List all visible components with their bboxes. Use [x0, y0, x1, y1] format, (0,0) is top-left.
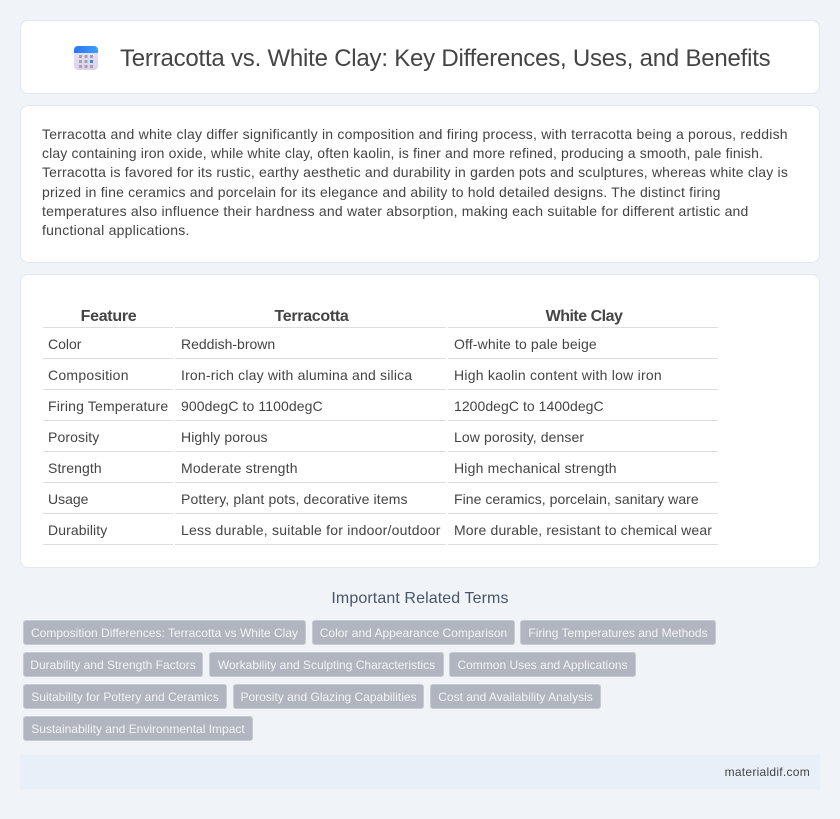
tag [209, 652, 444, 677]
description text [42, 126, 788, 238]
title: Terracotta vs. White Clay: Key Differences, Uses, and Benefits [120, 45, 770, 72]
header panel [20, 20, 820, 94]
tag: Suitability for Pottery and Ceramics [31, 690, 219, 704]
table header: Feature [81, 308, 136, 325]
tag [312, 620, 515, 645]
description text: Terracotta and white clay differ significantly in composition and firing process, with terracotta being a porous, reddish [42, 126, 788, 142]
tag [23, 652, 203, 677]
row: strength: Strength [48, 460, 102, 476]
row: porosity: Low porosity, denser [454, 429, 584, 445]
tag [23, 620, 306, 645]
table header: White Clay [546, 308, 622, 325]
tag: Color and Appearance Comparison [320, 626, 507, 640]
row: strength: High mechanical strength [454, 460, 617, 476]
table header [43, 308, 718, 328]
row: color [43, 336, 718, 359]
row: porosity: Porosity [48, 429, 99, 445]
panel: comparison table [20, 274, 820, 568]
row: durability: Less durable, suitable for indoor/outdoor [181, 522, 441, 538]
tag: Firing Temperatures and Methods [528, 626, 708, 640]
footer bar [20, 755, 820, 789]
tag [430, 684, 601, 709]
row: durability: More durable, resistant to chemical wear [454, 522, 712, 538]
row: color: Off-white to pale beige [454, 336, 597, 352]
tag group [23, 620, 716, 741]
footer source: materialdif.com [725, 765, 810, 779]
row: usage: Usage [48, 491, 88, 507]
row: usage [43, 491, 718, 514]
row: strength [43, 460, 718, 483]
table header: Terracotta [274, 308, 349, 325]
tag: Sustainability and Environmental Impact [31, 722, 245, 736]
tag: Common Uses and Applications [457, 658, 628, 672]
row: composition [43, 367, 718, 390]
row: durability [43, 522, 718, 545]
row: durability: Durability [48, 522, 107, 538]
row: firing temperature [43, 398, 718, 421]
tag: Porosity and Glazing Capabilities [240, 690, 417, 704]
heading: related terms: Important Related Terms [331, 590, 509, 607]
row: porosity: Highly porous [181, 429, 268, 445]
description text: temperatures also influence their hardness and water absorption, making each suitable for different artistic and [42, 203, 749, 219]
row: firing temperature: Firing Temperature [48, 398, 168, 414]
row: composition: High kaolin content with low iron [454, 367, 662, 383]
tag [233, 684, 424, 709]
row: firing temperature: 900degC to 1100degC [181, 398, 323, 414]
row: strength: Moderate strength [181, 460, 298, 476]
tag: Composition Differences: Terracotta vs White Clay [31, 626, 298, 640]
description text: clay containing iron oxide, while white clay, often kaolin, is finer and more refined, producing a smooth, pale finish. [42, 145, 763, 161]
row: color: Reddish-brown [181, 336, 275, 352]
row: porosity [43, 429, 718, 452]
description text: functional applications. [42, 222, 190, 238]
tag [520, 620, 716, 645]
icon: calendar [74, 46, 98, 70]
row: firing temperature: 1200degC to 1400degC [454, 398, 604, 414]
row: composition: Composition [48, 367, 129, 383]
table [43, 308, 718, 545]
row: usage: Pottery, plant pots, decorative items [181, 491, 408, 507]
tag: Cost and Availability Analysis [438, 690, 593, 704]
row: usage: Fine ceramics, porcelain, sanitary ware [454, 491, 699, 507]
panel: description [20, 105, 820, 263]
row: color: Color [48, 336, 81, 352]
tag: Workability and Sculpting Characteristics [218, 658, 435, 672]
description text: prized in fine ceramics and porcelain for its elegance and ability to hold detailed designs. The distinct firing [42, 184, 721, 200]
tag [23, 684, 227, 709]
description text: Terracotta is favored for its rustic, earthy aesthetic and durability in garden pots and sculptures, whereas white clay is [42, 164, 788, 180]
tag [449, 652, 636, 677]
row: composition: Iron-rich clay with alumina and silica [181, 367, 412, 383]
tag: Durability and Strength Factors [30, 658, 196, 672]
tag [23, 716, 253, 741]
